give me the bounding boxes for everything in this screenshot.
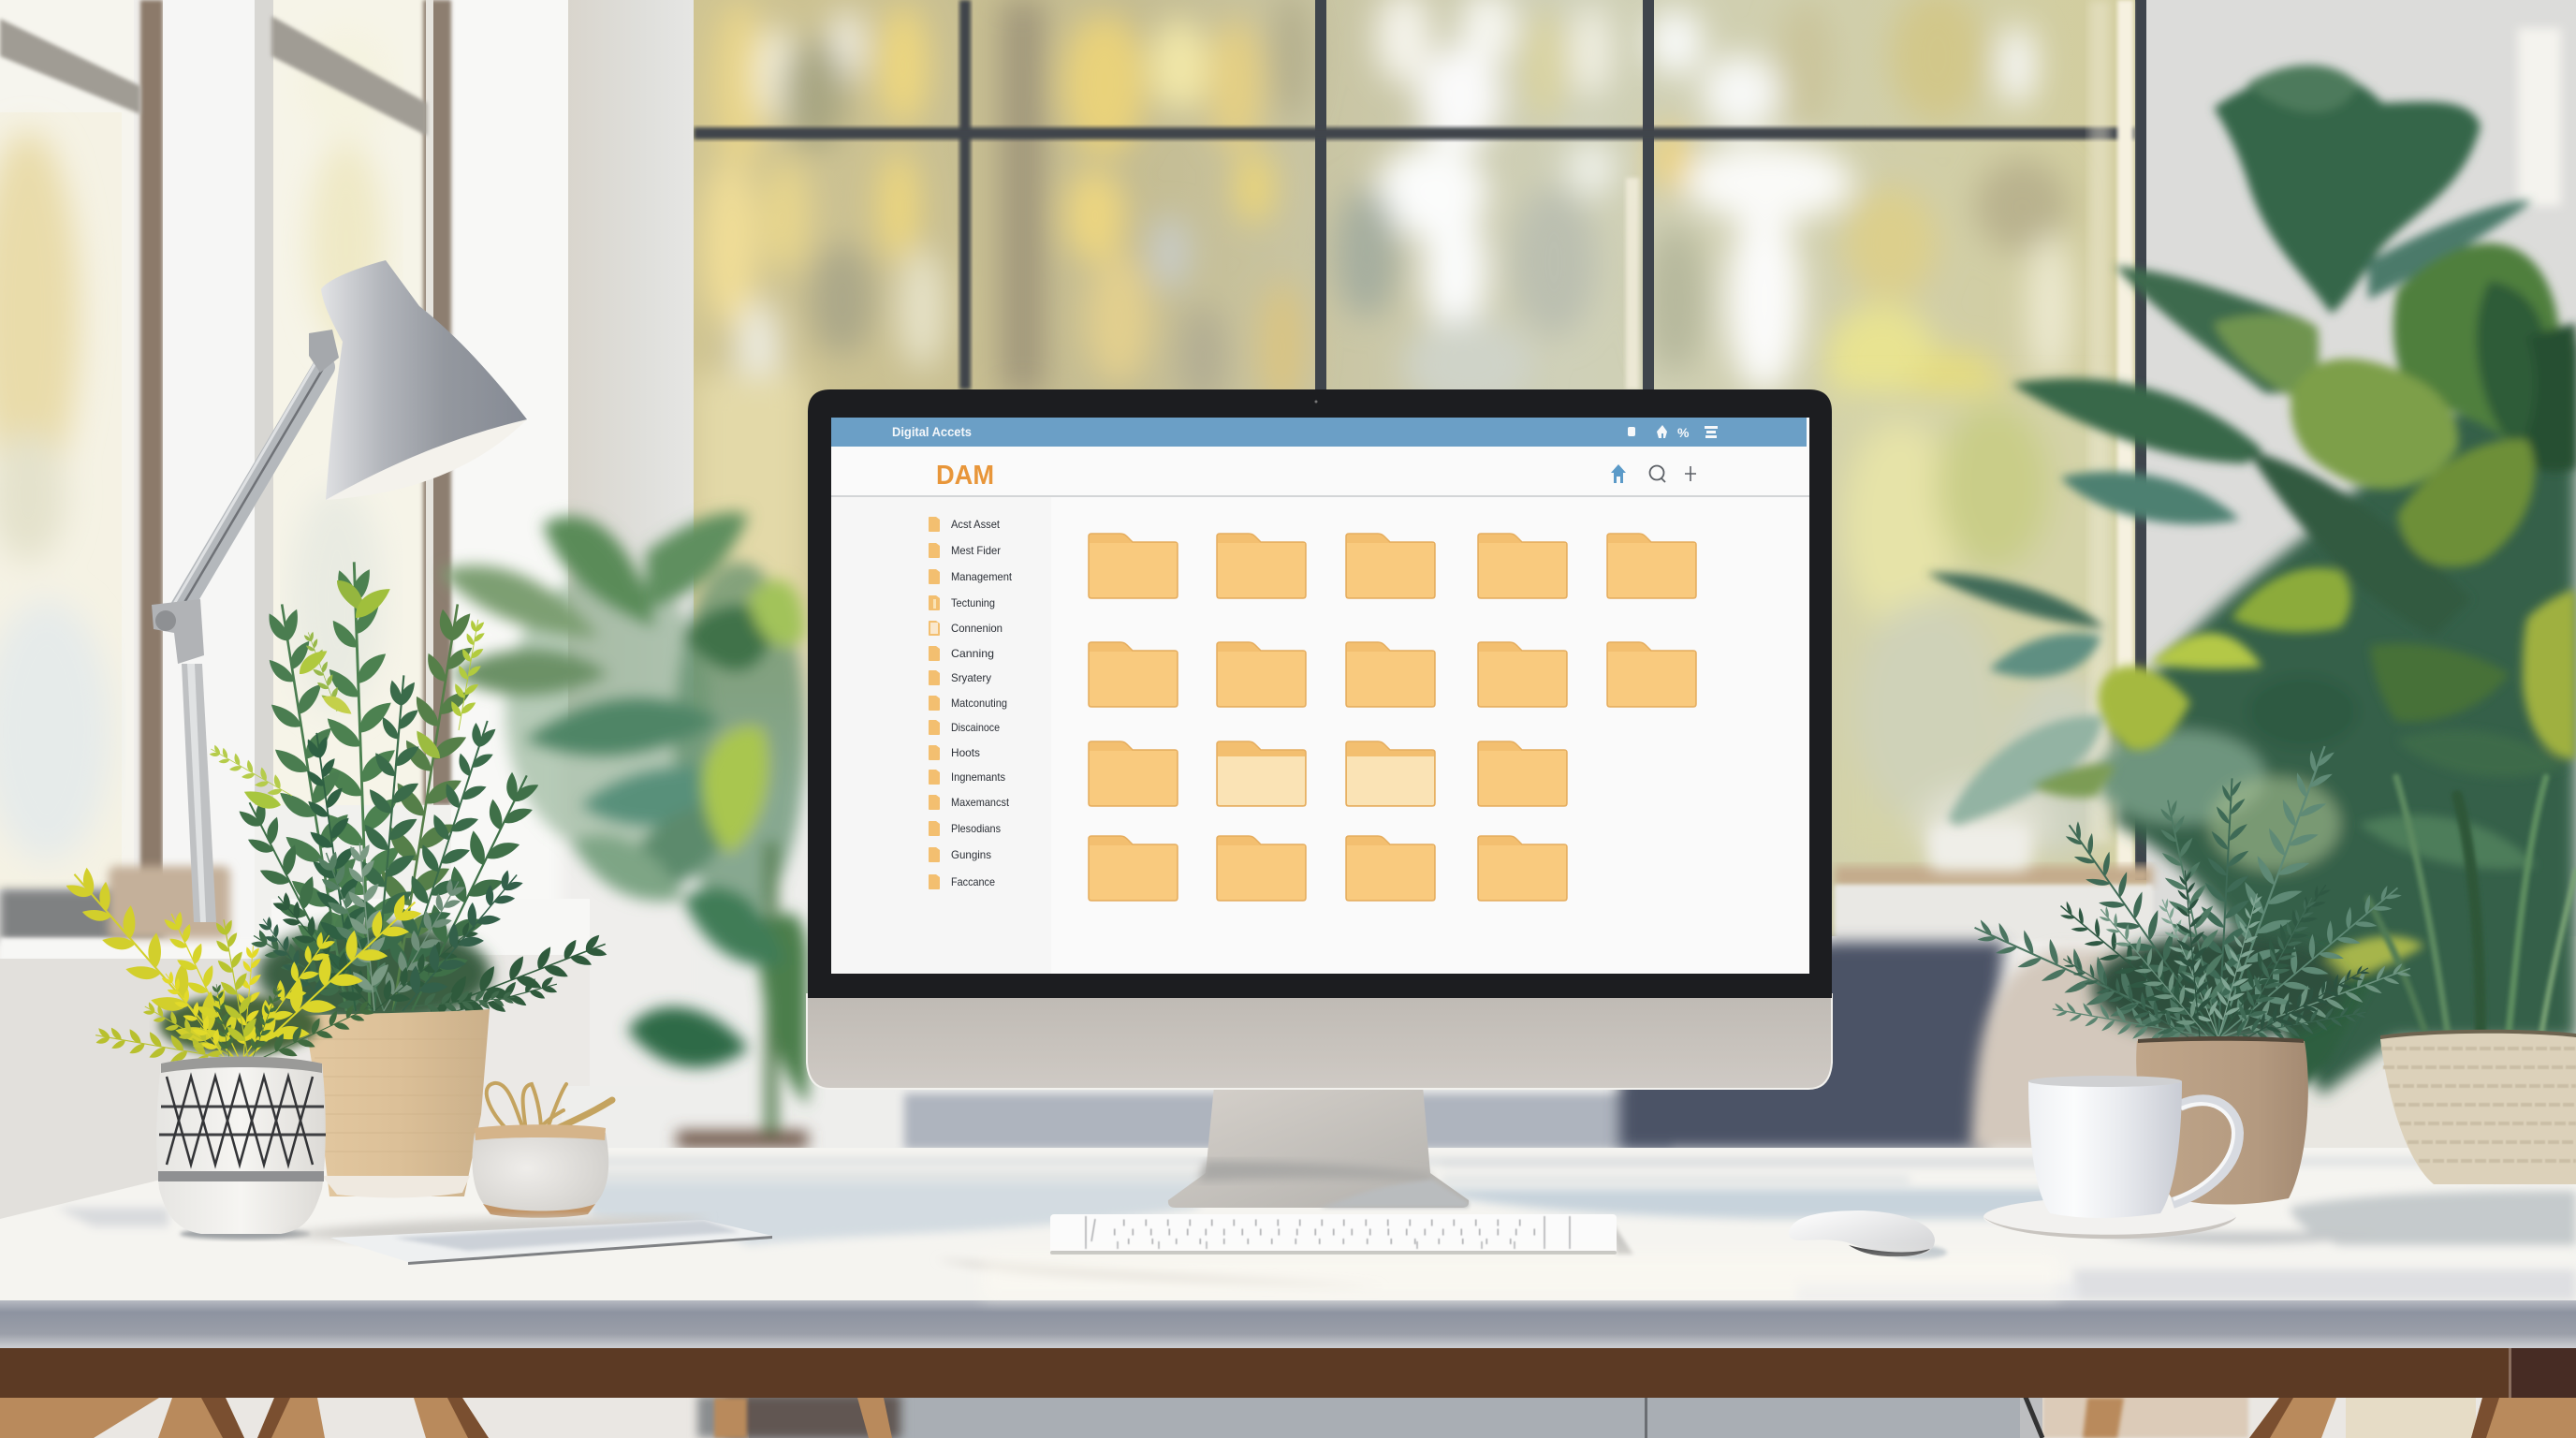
sidebar item: Connenion: Connenion xyxy=(951,622,1003,635)
sidebar item: Mest Fider: Mest Fider xyxy=(951,544,1001,557)
top bar icons: % xyxy=(1677,425,1690,440)
sidebar item: Canning xyxy=(929,646,994,661)
sidebar item: Matconuting: Matconuting xyxy=(951,697,1007,710)
monitor xyxy=(807,389,1832,1208)
sidebar item: Mest Fider xyxy=(929,543,1001,558)
folder row 3 column 4 xyxy=(1478,741,1567,806)
lime sprig tips xyxy=(205,575,491,814)
desk legs and floor beneath desk xyxy=(0,1395,2576,1438)
sidebar item: Discainoce: Discainoce xyxy=(951,721,1000,734)
green sprigs xyxy=(222,561,614,1037)
folder row 4 column 4 xyxy=(1478,836,1567,901)
folder row 1 column 4 xyxy=(1478,534,1567,598)
sidebar item: Plesodians xyxy=(929,821,1001,836)
sidebar item: Hoots: Hoots xyxy=(951,746,980,759)
desk front edge xyxy=(0,1300,2576,1348)
sidebar item: Gungins xyxy=(929,847,991,862)
left window diagonal frame bars xyxy=(0,16,427,136)
folder row 2 column 4 xyxy=(1478,642,1567,707)
brass clips xyxy=(487,1083,612,1133)
sidebar item: Faccance: Faccance xyxy=(951,875,995,888)
top bar title: Digital Accets xyxy=(892,424,972,439)
lamp pole xyxy=(182,664,216,922)
left tall windows xyxy=(0,0,590,1230)
desk top surface xyxy=(0,1148,2576,1300)
sidebar item: Maxemancst: Maxemancst xyxy=(951,796,1010,809)
woven planter xyxy=(2380,1030,2576,1184)
right plant stems xyxy=(2368,777,2576,1034)
saucer xyxy=(1983,1197,2236,1237)
window frame: central dark mullions xyxy=(694,0,2146,880)
header logo: DAM xyxy=(936,461,994,491)
notebook on desk xyxy=(281,1217,772,1265)
yellow sprigs xyxy=(50,855,434,1079)
folder row 2 column 3 xyxy=(1346,642,1435,707)
folder row 3 column 1 xyxy=(1089,741,1178,806)
clay pot xyxy=(2136,1037,2308,1205)
sidebar item: Matconuting xyxy=(929,696,1007,711)
folder row 1 column 3 xyxy=(1346,534,1435,598)
folder row 1 column 5 xyxy=(1607,534,1696,598)
sidebar item: Tectuning: Tectuning xyxy=(951,596,995,609)
sidebar item: Discainoce xyxy=(929,720,1000,735)
keyboard xyxy=(1050,1214,1633,1255)
lamp xyxy=(152,260,527,922)
lamp shade interior xyxy=(326,419,527,500)
folder row 2 column 1 xyxy=(1089,642,1178,707)
mouse xyxy=(1789,1211,1947,1259)
folder row 1 column 1 xyxy=(1089,534,1178,598)
sidebar item: Tectuning xyxy=(929,595,995,610)
desk wood apron xyxy=(0,1348,2576,1398)
sidebar item: Management: Management xyxy=(951,570,1013,583)
blurred background plant, left of monitor xyxy=(440,512,808,1148)
cup body xyxy=(2028,1077,2182,1218)
background: large garden window with blurred trees xyxy=(688,0,2149,1161)
desk xyxy=(0,1148,2576,1398)
bowl body xyxy=(472,1129,608,1217)
monitor chin xyxy=(807,994,1832,1089)
sidebar item: Acst Asset: Acst Asset xyxy=(951,518,1001,531)
icon: home xyxy=(1611,464,1626,483)
fern fronds xyxy=(1963,735,2417,1064)
sidebar item: Ingnemants: Ingnemants xyxy=(951,770,1005,784)
sidebar item: Gungins: Gungins xyxy=(951,848,991,861)
sunlight highlight overlay on the lower desk xyxy=(983,1255,2059,1299)
lamp shade xyxy=(321,260,527,500)
folder row 3 column 2 (light) xyxy=(1217,741,1306,806)
yellow plant in patterned pot xyxy=(50,855,434,1240)
folder row 1 column 2 xyxy=(1217,534,1306,598)
sidebar item: Hoots xyxy=(929,745,980,760)
monitor stand xyxy=(1168,1086,1469,1208)
window frame: cream edge strips xyxy=(1626,0,2133,880)
large blurred plant on the right xyxy=(1926,65,2576,1095)
window lower tree foliage xyxy=(1835,393,2134,861)
top bar icons xyxy=(1628,425,1718,440)
sidebar item: Acst Asset xyxy=(929,517,1001,532)
top bar xyxy=(831,418,1807,447)
lamp joints xyxy=(152,599,204,664)
icon: plus xyxy=(1685,466,1696,481)
folder row 2 column 5 xyxy=(1607,642,1696,707)
cup handle xyxy=(2173,1100,2238,1203)
sidebar item: Ingnemants xyxy=(929,770,1005,785)
sidebar item: Plesodians: Plesodians xyxy=(951,822,1001,835)
sidebar item: Sryatery: Sryatery xyxy=(951,671,991,684)
icon: search xyxy=(1649,466,1665,482)
folder row 3 column 3 (light) xyxy=(1346,741,1435,806)
folder row 4 column 1 xyxy=(1089,836,1178,901)
sidebar item: Management xyxy=(929,569,1013,584)
sidebar item: Faccance xyxy=(929,874,995,889)
coffee cup and saucer xyxy=(1983,1076,2238,1239)
sidebar xyxy=(831,497,1051,974)
desk shadows xyxy=(56,1159,2576,1300)
window sill and sofa behind desk xyxy=(562,824,2576,1152)
sidebar item: Sryatery xyxy=(929,670,991,685)
sidebar item: Maxemancst xyxy=(929,795,1010,810)
folder row 4 column 3 xyxy=(1346,836,1435,901)
folder grid xyxy=(1089,534,1696,901)
sidebar item: Canning: Canning xyxy=(951,647,994,660)
left wall pillar and central wall column xyxy=(449,0,695,1148)
sidebar item: Connenion xyxy=(929,621,1003,636)
small bowl with brass clips xyxy=(472,1083,612,1218)
webcam xyxy=(1314,401,1318,403)
header icons xyxy=(1611,464,1696,483)
tan pot xyxy=(304,1009,490,1198)
left plant in tan pot xyxy=(205,561,614,1198)
lamp arm xyxy=(171,361,324,610)
patterned pot xyxy=(156,1056,326,1240)
folder row 4 column 2 xyxy=(1217,836,1306,901)
right wall xyxy=(2146,0,2576,936)
screen xyxy=(831,418,1809,974)
monitor bezel xyxy=(808,389,1832,998)
fern in clay pot xyxy=(1963,735,2417,1205)
folder row 2 column 2 xyxy=(1217,642,1306,707)
